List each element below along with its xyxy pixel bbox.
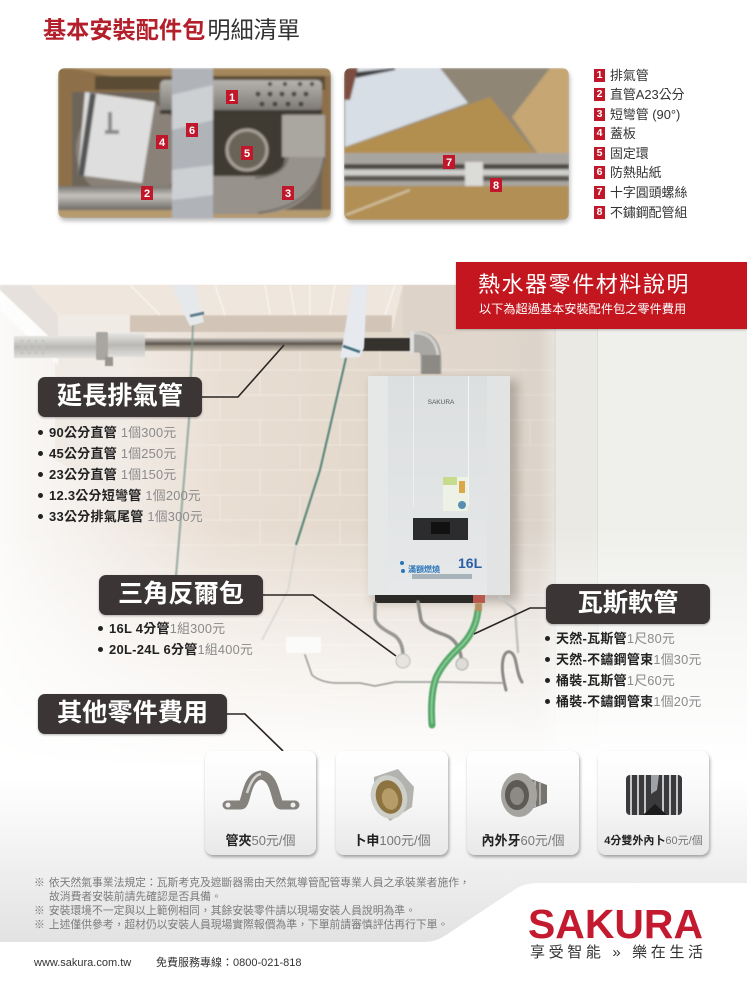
vent pipe: [14, 331, 440, 374]
footnotes: ※ 依天然氣事業法規定：瓦斯考克及遮斷器需由天然氣導管配管專業人員之承裝業者施作，: [34, 877, 470, 889]
gas hose price list: 天然-瓦斯管1尺80元: [556, 631, 675, 646]
SAKURA logo: SAKURA: [528, 901, 703, 947]
numbered tags on photo 2: 8: [493, 180, 499, 192]
heading: extended vent pipe: [38, 377, 202, 417]
card: reducer bushing: 卜申100元/個: [353, 833, 431, 848]
red banner: 以下為超過基本安裝配件包之零件費用: [479, 302, 686, 316]
parts list legend: 4: [597, 127, 602, 139]
numbered tags on photo 1: 5: [244, 148, 250, 160]
footnotes: [34, 876, 470, 931]
vent pipe price list: 33公分排氣尾管 1個300元: [49, 509, 203, 524]
red banner: 熱水器零件材料說明: [478, 272, 690, 297]
card: male-female adapter: [467, 751, 579, 855]
water heater: [368, 376, 510, 603]
red banner: [456, 262, 747, 329]
water heater: 滿額燃燒: [408, 564, 440, 574]
icon: reducer bushing: [370, 769, 414, 821]
parts list legend: 7: [597, 186, 602, 198]
icon: adapter fitting: [501, 773, 547, 817]
photo 2: screws and tube set: [344, 68, 570, 223]
numbered tags on photo 2: [443, 155, 502, 192]
card: male-female adapter: 內外牙60元/個: [481, 833, 565, 848]
heading: extended vent pipe: 延長排氣管: [57, 382, 183, 410]
heading: other parts cost: 其他零件費用: [57, 699, 208, 727]
photo 1: accessories box: [58, 68, 332, 221]
parts list legend: 3: [597, 108, 602, 120]
numbered tags on photo 1: 3: [285, 188, 291, 200]
parts list legend: 十字圓頭螺絲: [610, 185, 687, 200]
SAKURA logo: 享受智能 » 樂在生活: [530, 943, 703, 961]
heading: gas hose: 瓦斯軟管: [578, 589, 678, 617]
numbered tags on photo 1: 6: [189, 125, 195, 137]
vent pipe price list: 23公分直管 1個150元: [49, 467, 176, 482]
vent pipe price list: 90公分直管 1個300元: [49, 425, 176, 440]
website and hotline: www.sakura.com.tw: [34, 957, 131, 969]
gas hose price list: 桶裝-瓦斯管1尺60元: [556, 673, 675, 688]
parts list legend: 2: [597, 88, 602, 100]
parts list legend: 不鏽鋼配管組: [610, 205, 687, 220]
vent pipe price list: [38, 425, 203, 524]
website and hotline: [34, 956, 302, 969]
connector lines: [202, 345, 546, 751]
card: double male fitting: [598, 751, 709, 855]
numbered tags on photo 1: 4: [159, 137, 166, 149]
lower wall area: [55, 316, 69, 466]
gas hose price list: 天然-不鏽鋼管束1個30元: [556, 652, 702, 667]
gas hose price list: [545, 631, 702, 709]
parts list legend: 短彎管 (90°): [610, 107, 680, 122]
lower grey band: [0, 780, 747, 942]
valve kit price list: 20L-24L 6分管1組400元: [109, 642, 253, 657]
parts list legend: [594, 68, 687, 220]
heater shadow: [372, 380, 518, 602]
parts list legend: 防熱貼紙: [610, 165, 662, 180]
heading: gas hose: [546, 584, 710, 624]
card: pipe clamp: 管夾50元/個: [225, 833, 296, 848]
heading: triangle valve kit: 三角反爾包: [118, 580, 244, 608]
website and hotline: 免費服務專線：0800-021-818: [156, 957, 302, 969]
icon: threaded double fitting: [626, 775, 682, 815]
parts list legend: 8: [597, 206, 602, 218]
parts list legend: 蓋板: [610, 126, 636, 141]
numbered tags on photo 1: 1: [229, 92, 235, 104]
parts list legend: 6: [597, 166, 602, 178]
parts list legend: 固定環: [610, 146, 649, 161]
card: reducer bushing: [336, 751, 448, 855]
numbered tags on photo 2: 7: [446, 157, 452, 169]
vent pipe price list: 12.3公分短彎管 1個200元: [49, 488, 201, 503]
gas hose price list: 桶裝-不鏽鋼管束1個20元: [556, 694, 702, 709]
valve kit price list: [98, 621, 253, 657]
numbered tags on photo 1: 2: [144, 188, 150, 200]
parts list legend: 5: [597, 147, 602, 159]
ceiling: [0, 285, 456, 365]
valve kit price list: 16L 4分管1組300元: [109, 621, 225, 636]
vent pipe price list: 45公分直管 1個250元: [49, 446, 176, 461]
water heater: 16L: [458, 555, 483, 571]
card: double male fitting: 4分雙外內卜60元/個: [604, 835, 703, 847]
parts list legend: 直管A23公分: [610, 87, 684, 102]
hose hangers and wires: [172, 285, 367, 640]
parts list legend: 1: [597, 69, 602, 81]
footnotes: ※ 安裝環境不一定與以上範例相同，其餘安裝零件請以現場安裝人員說明為準。: [34, 905, 416, 917]
heading: other parts cost: [38, 694, 227, 734]
water heater: SAKURA: [428, 399, 455, 406]
footnotes: 故消費者安裝前請先確認是否具備。: [49, 891, 222, 903]
heading: triangle valve kit: [99, 575, 263, 615]
parts list legend: 排氣管: [610, 68, 649, 83]
footnotes: ※ 上述僅供參考，超材仍以安裝人員現場實際報價為準，下單前請審慎評估再行下單。: [34, 919, 448, 931]
numbered tags on photo 1: [141, 90, 294, 200]
icon: pipe clamp: [222, 770, 300, 810]
card: pipe clamp: [205, 751, 316, 855]
heater plumbing: [286, 597, 522, 725]
title: 基本安裝配件包明細清單: [43, 17, 300, 43]
